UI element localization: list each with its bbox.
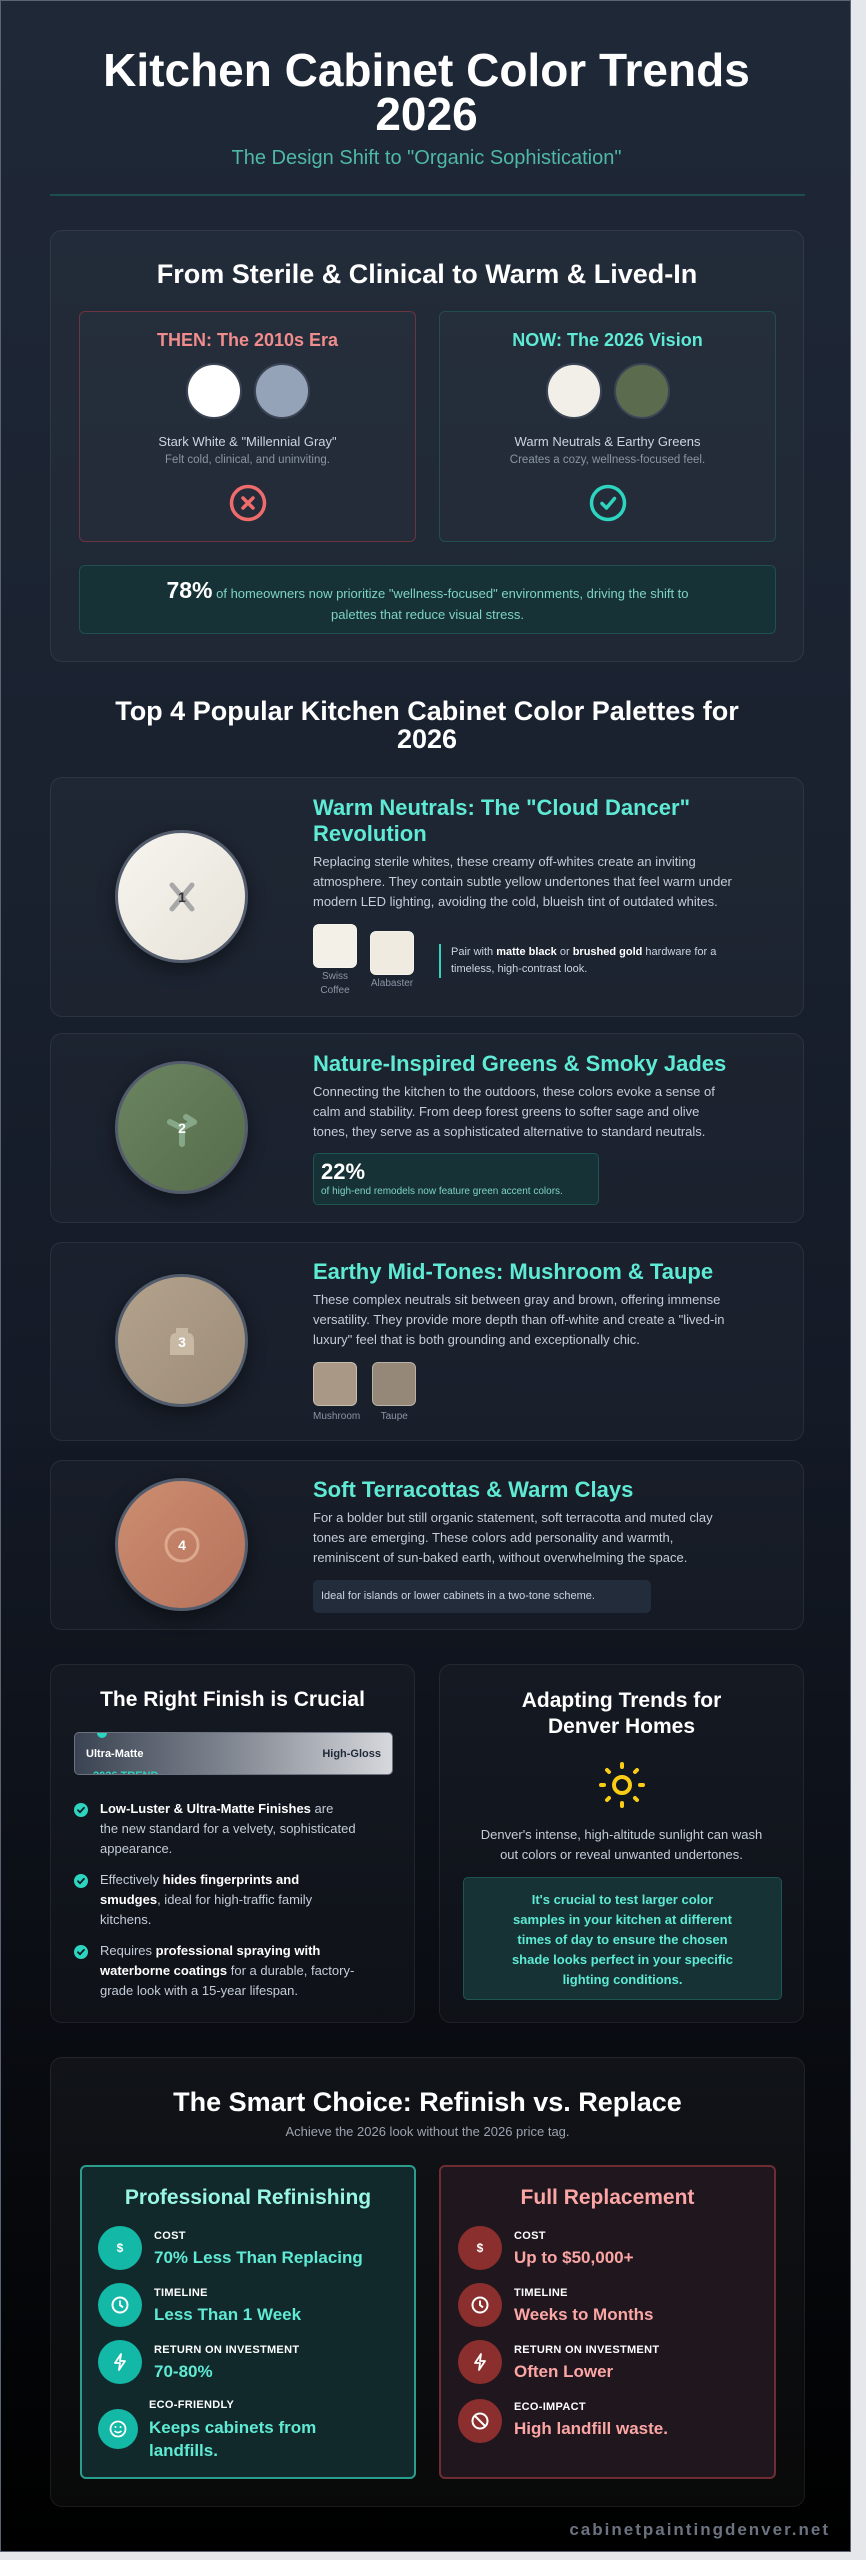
heading: denver xyxy=(522,1689,721,1738)
text: sunlight note xyxy=(481,1827,762,1862)
panel: then xyxy=(79,311,416,542)
list: finish benefits: grade look with a 15-year lifespan. xyxy=(100,1983,298,1998)
text: warm neutrals xyxy=(313,795,732,996)
list: finish benefits: Requires professional spraying with xyxy=(100,1943,320,1958)
list: finish benefits xyxy=(74,1801,356,1998)
list: finish benefits: appearance. xyxy=(100,1841,172,1856)
callout: test samples: samples in your kitchen at different xyxy=(513,1912,732,1927)
callout: test samples xyxy=(463,1877,782,2000)
text: earthy mid-tones: luxury" feel that is both grounding and exceptionally chic. xyxy=(313,1332,640,1347)
panel: now: NOW: The 2026 Vision xyxy=(512,330,703,350)
callout: 78% stat: 78% of homeowners now prioritize "wellness-focused" environments, driving the shift to xyxy=(166,577,689,603)
heading: denver: Adapting Trends for xyxy=(522,1689,721,1712)
text: sunlight note: Denver's intense, high-altitude sunlight can wash xyxy=(481,1827,762,1842)
list: finish benefits: smudges, ideal for high-traffic family xyxy=(100,1892,312,1907)
panel: full replacement xyxy=(439,2165,776,2479)
text: greens: Connecting the kitchen to the outdoors, these colors evoke a sense of xyxy=(313,1084,715,1099)
list: finish benefits: waterborne coatings for a durable, factory- xyxy=(100,1963,354,1978)
callout: 22% stat xyxy=(313,1153,599,1205)
chart: matte to gloss scale: Ultra-Matte xyxy=(86,1748,143,1760)
swatches: swiss coffee, alabaster, hardware tip: Swiss xyxy=(322,971,348,982)
panel: warm neutrals xyxy=(50,777,804,1017)
heading: top 4 palettes xyxy=(115,696,739,754)
callout: two-tone tip xyxy=(313,1580,651,1613)
callout: 22% stat: of high-end remodels now feature green accent colors. xyxy=(321,1186,563,1197)
icon: taupe circle 3 xyxy=(115,1274,248,1407)
text: terracottas: reminiscent of sun-baked earth, without overwhelming the space. xyxy=(313,1550,687,1565)
text: warm neutrals: Warm Neutrals: The "Cloud Dancer" xyxy=(313,795,690,820)
panel: then vs now xyxy=(50,230,804,662)
panel: full replacement: Full Replacement xyxy=(521,2186,694,2209)
text: earthy mid-tones: versatility. They provide more depth than off-white and create a "lived-in xyxy=(313,1312,724,1327)
chart: matte to gloss scale: High-Gloss xyxy=(322,1748,381,1760)
row: eco-friendly xyxy=(98,2399,316,2460)
text: earthy mid-tones: Earthy Mid-Tones: Mushroom & Taupe xyxy=(313,1259,713,1284)
text: warm neutrals: Replacing sterile whites, these creamy off-whites create an inviting xyxy=(313,854,696,869)
panel: full replacement: COST xyxy=(514,2230,546,2242)
title: 2026 xyxy=(375,88,478,140)
callout: test samples: It's crucial to test larger color xyxy=(532,1892,713,1907)
callout: two-tone tip: Ideal for islands or lower cabinets in a two-tone scheme. xyxy=(321,1590,595,1602)
swatches: mushroom, taupe xyxy=(313,1362,416,1422)
panel: full replacement: Often Lower xyxy=(514,2362,613,2381)
panel: full replacement: $ xyxy=(477,2241,483,2255)
icon: green circle 2 xyxy=(115,1061,248,1194)
callout: 78% stat xyxy=(79,565,776,634)
heading: top 4 palettes: Top 4 Popular Kitchen Cabinet Color Palettes for xyxy=(115,696,739,726)
panel: earthy mid-tones xyxy=(50,1242,804,1441)
text: terracottas: For a bolder but still organic statement, soft terracotta and muted clay xyxy=(313,1510,713,1525)
list: finish benefits: Effectively hides fingerprints and xyxy=(100,1872,299,1887)
panel: full replacement: ECO-IMPACT xyxy=(514,2401,586,2413)
row: cost xyxy=(98,2226,363,2270)
icon: cream circle 1 xyxy=(115,830,248,963)
text: earthy mid-tones xyxy=(313,1259,724,1422)
text: warm neutrals: Revolution xyxy=(313,821,427,846)
text: greens: calm and stability. From deep forest greens to softer sage and olive xyxy=(313,1104,699,1119)
swatches: white and gray xyxy=(186,363,310,419)
panel: denver xyxy=(439,1664,804,2023)
icon: taupe circle 3: 3 xyxy=(178,1334,186,1350)
list: finish benefits: kitchens. xyxy=(100,1912,151,1927)
panel: finish xyxy=(50,1664,415,2023)
footer: website: cabinetpaintingdenver.net xyxy=(569,2520,830,2539)
row: roi xyxy=(458,2340,659,2384)
swatches: swiss coffee, alabaster, hardware tip: timeless, high-contrast look. xyxy=(451,963,587,975)
panel: refinish vs replace: Achieve the 2026 look without the 2026 price tag. xyxy=(285,2124,570,2139)
panel: terracottas xyxy=(50,1460,804,1630)
panel: now: Warm Neutrals & Earthy Greens xyxy=(515,434,700,449)
panel: professional refinishing: ECO-FRIENDLY xyxy=(149,2399,234,2411)
icon: check circle xyxy=(590,484,626,522)
panel: refinish vs replace xyxy=(50,2057,805,2507)
title: Kitchen Cabinet Color Trends xyxy=(103,44,750,96)
row: timeline xyxy=(98,2283,301,2327)
panel: now xyxy=(439,311,776,542)
swatches: swiss coffee, alabaster, hardware tip: Coffee xyxy=(320,985,350,996)
icon: terracotta circle 4 xyxy=(115,1478,248,1611)
callout: 22% stat: 22% xyxy=(321,1159,365,1184)
text: greens: Nature-Inspired Greens & Smoky Jades xyxy=(313,1051,726,1076)
panel: professional refinishing: 70% Less Than Replacing xyxy=(154,2248,363,2267)
icon: cream circle 1: 1 xyxy=(178,888,186,904)
text: greens: tones, they serve as a sophisticated alternative to standard neutrals. xyxy=(313,1124,705,1139)
panel: professional refinishing xyxy=(80,2165,416,2479)
heading: finish: The Right Finish is Crucial xyxy=(100,1688,365,1711)
panel: full replacement: RETURN ON INVESTMENT xyxy=(514,2344,659,2356)
panel: professional refinishing: RETURN ON INVESTMENT xyxy=(154,2344,299,2356)
text: earthy mid-tones: These complex neutrals sit between gray and brown, offering immense xyxy=(313,1292,720,1307)
swatches: swiss coffee, alabaster, hardware tip xyxy=(313,924,716,996)
heading: smart choice: The Smart Choice: Refinish vs. Replace xyxy=(173,2087,682,2117)
list: finish benefits: the new standard for a velvety, sophisticated xyxy=(100,1821,356,1836)
row: timeline xyxy=(458,2283,653,2327)
panel: professional refinishing: $ xyxy=(117,2241,123,2255)
row: eco-impact xyxy=(458,2399,668,2443)
callout: 78% stat: palettes that reduce visual stress. xyxy=(331,607,524,622)
swatches: mushroom, taupe: Taupe xyxy=(381,1411,408,1422)
title xyxy=(103,44,750,140)
icon: x circle xyxy=(230,484,266,522)
panel: then: THEN: The 2010s Era xyxy=(157,330,338,350)
swatches: swiss coffee, alabaster, hardware tip: Pair with matte black or brushed gold hardware for a xyxy=(451,946,716,958)
panel: full replacement: Weeks to Months xyxy=(514,2305,653,2324)
heading: top 4 palettes: 2026 xyxy=(397,724,457,754)
icon: terracotta circle 4: 4 xyxy=(178,1536,186,1552)
panel: professional refinishing: landfills. xyxy=(149,2441,218,2460)
swatches: swiss coffee, alabaster, hardware tip: Alabaster xyxy=(371,978,413,989)
callout: test samples: times of day to ensure the chosen xyxy=(517,1932,728,1947)
text: terracottas: tones are emerging. These colors add personality and warmth, xyxy=(313,1530,673,1545)
panel: greens xyxy=(50,1033,804,1223)
panel: professional refinishing: 70-80% xyxy=(154,2362,213,2381)
text: sunlight note: out colors or reveal unwanted undertones. xyxy=(500,1847,743,1862)
panel: professional refinishing: COST xyxy=(154,2230,186,2242)
text: terracottas xyxy=(313,1477,713,1613)
subtitle: The Design Shift to "Organic Sophistication" xyxy=(232,147,621,169)
panel: now: Creates a cozy, wellness-focused feel. xyxy=(510,454,705,466)
icon: green circle 2: 2 xyxy=(178,1120,186,1136)
panel: full replacement: TIMELINE xyxy=(514,2287,568,2299)
list: finish benefits: Low-Luster & Ultra-Matte Finishes are xyxy=(100,1801,333,1816)
panel: then: Stark White & "Millennial Gray" xyxy=(158,434,337,449)
panel: then: Felt cold, clinical, and uninviting. xyxy=(165,454,330,466)
heading: sterile to warm: From Sterile & Clinical to Warm & Lived-In xyxy=(157,259,697,289)
text: greens xyxy=(313,1051,726,1205)
panel: full replacement: Up to $50,000+ xyxy=(514,2248,634,2267)
text: warm neutrals: atmosphere. They contain subtle yellow undertones that feel warm under xyxy=(313,874,732,889)
panel: full replacement: High landfill waste. xyxy=(514,2419,668,2438)
panel: professional refinishing: Keeps cabinets from xyxy=(149,2418,316,2437)
text: terracottas: Soft Terracottas & Warm Clays xyxy=(313,1477,633,1502)
panel: professional refinishing: Less Than 1 Week xyxy=(154,2305,301,2324)
text: warm neutrals: modern LED lighting, avoiding the cold, blueish tint of outdated whites. xyxy=(313,894,718,909)
row: cost xyxy=(458,2226,634,2270)
callout: test samples: lighting conditions. xyxy=(563,1972,682,1987)
chart: matte to gloss scale xyxy=(74,1732,393,1775)
callout: test samples: shade looks perfect in your specific xyxy=(512,1952,733,1967)
row: roi xyxy=(98,2340,299,2384)
heading: denver: Denver Homes xyxy=(548,1715,695,1738)
swatches: mushroom, taupe: Mushroom xyxy=(313,1411,360,1422)
swatches: cream and green xyxy=(546,363,670,419)
panel: professional refinishing: TIMELINE xyxy=(154,2287,208,2299)
panel: professional refinishing: Professional Refinishing xyxy=(125,2186,371,2209)
icon: sun xyxy=(599,1762,645,1808)
